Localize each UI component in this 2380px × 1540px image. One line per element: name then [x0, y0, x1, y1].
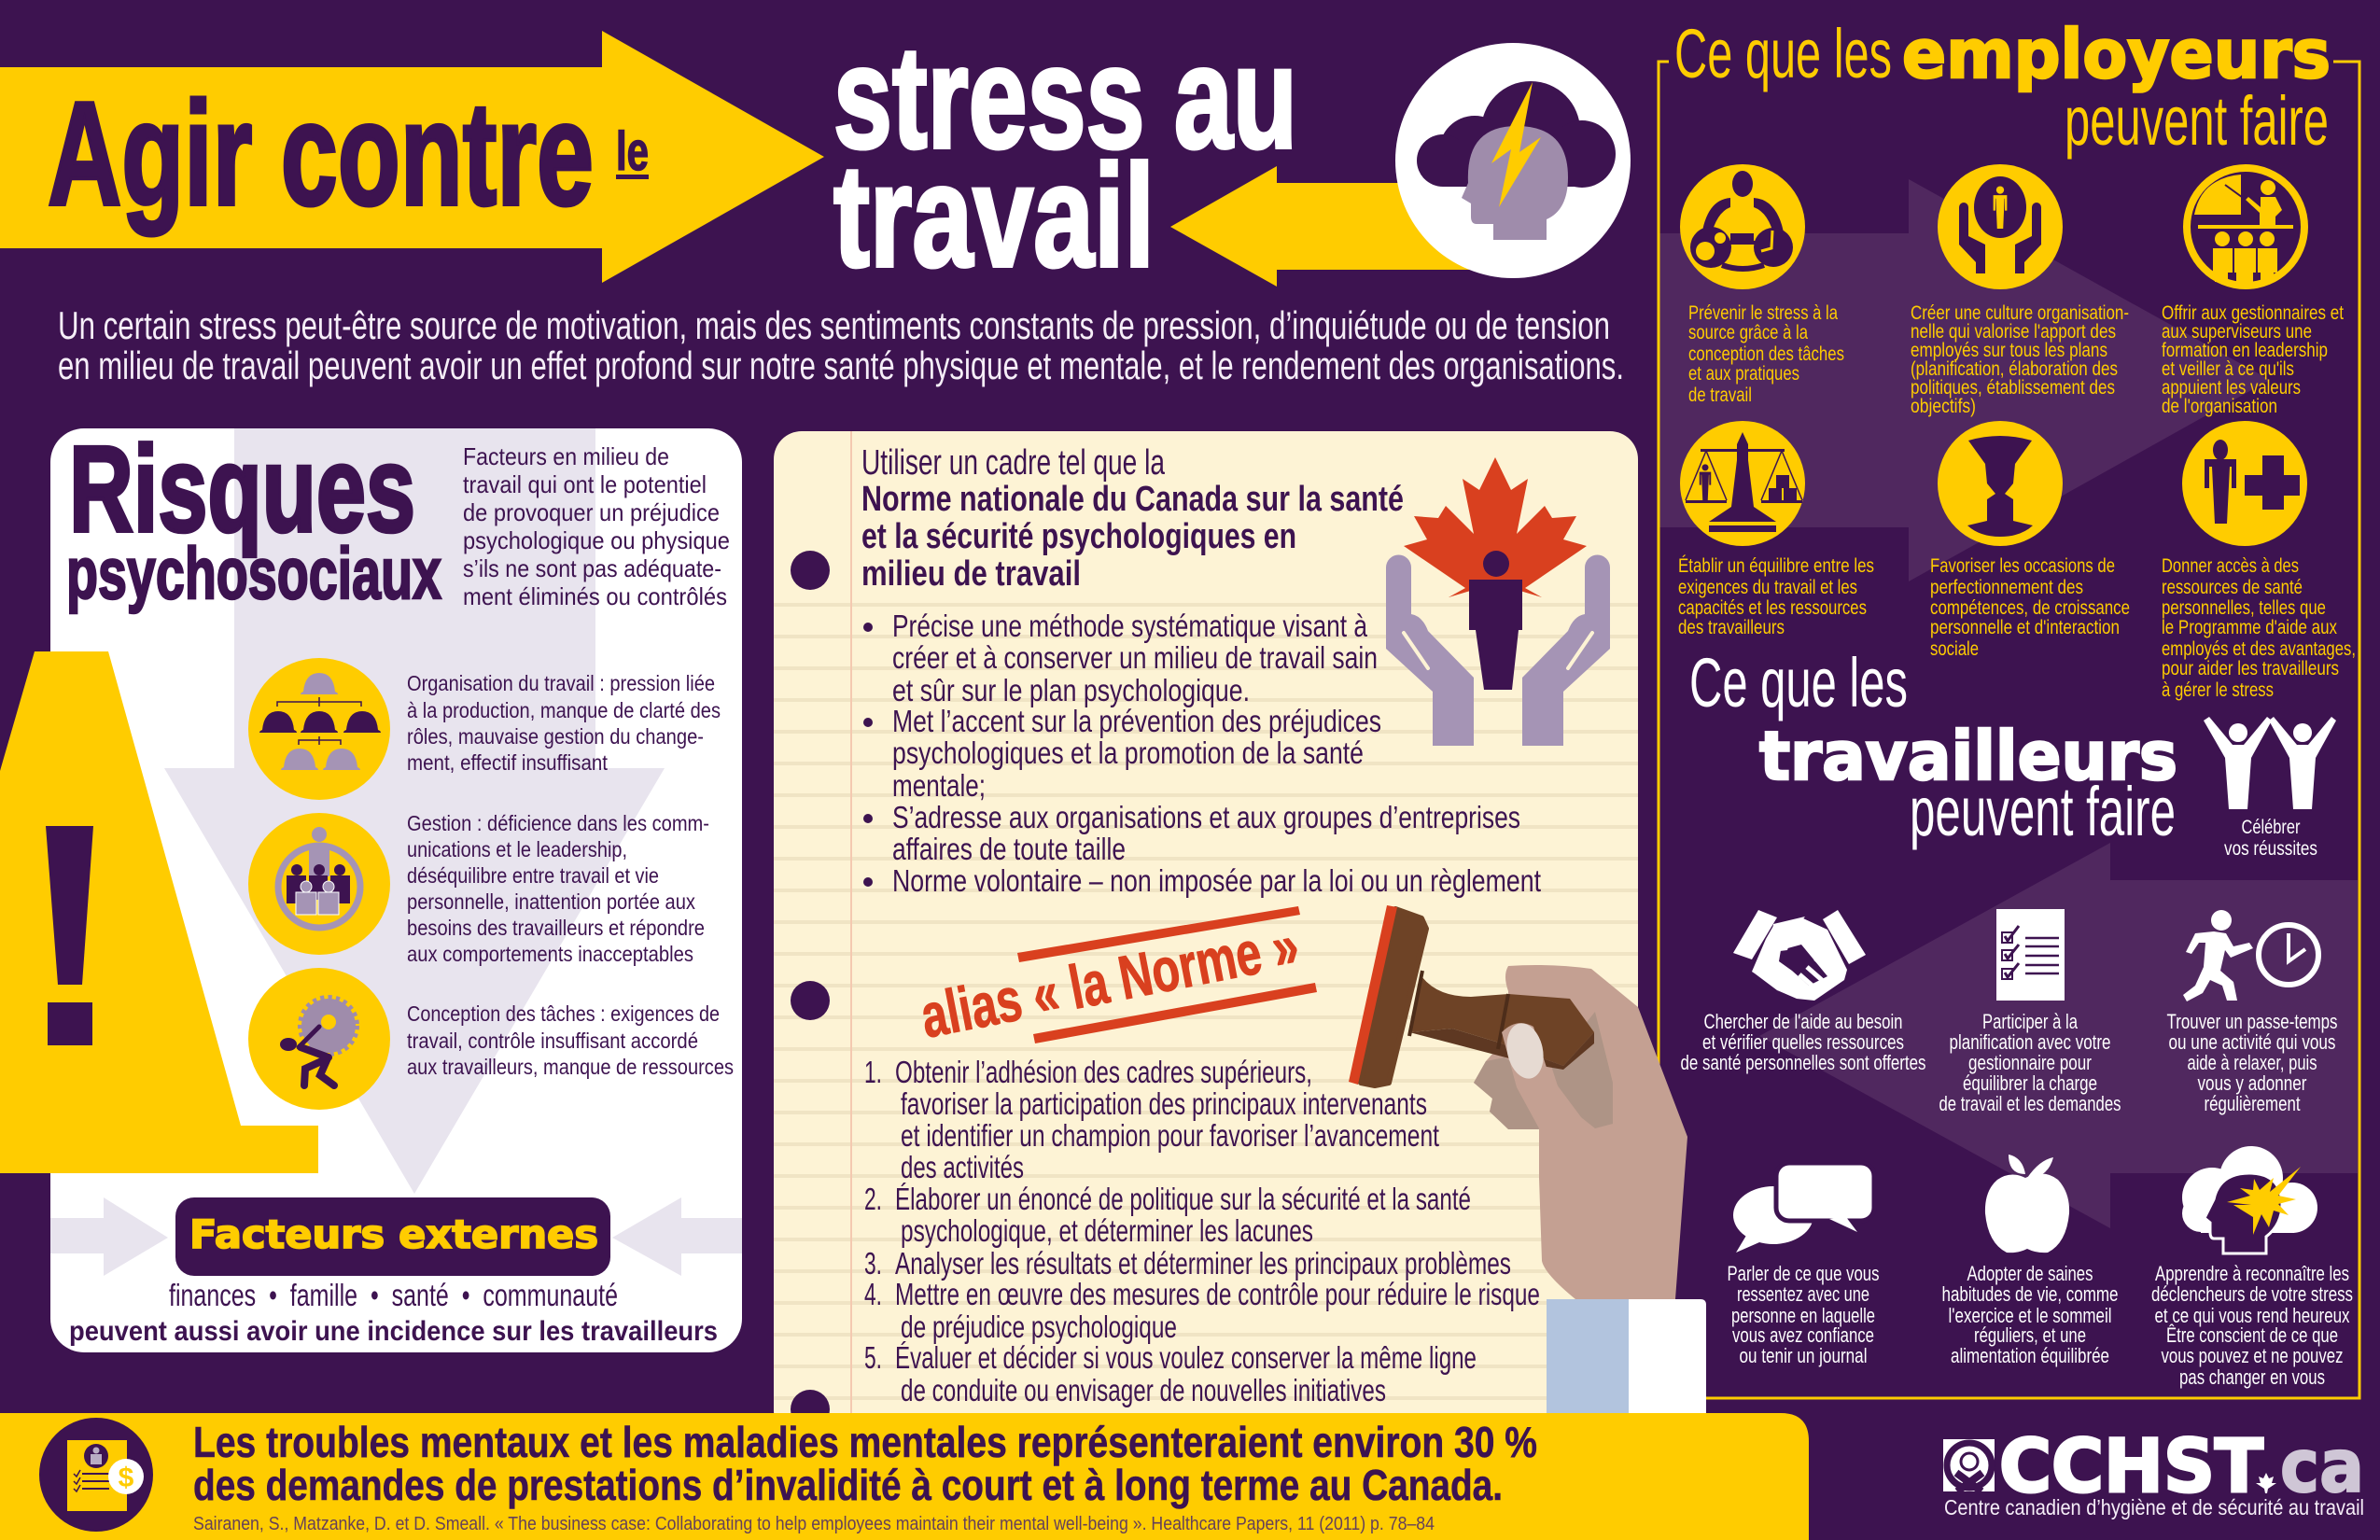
- panel border: [1659, 62, 2359, 1398]
- icon: document and dollar: $: [119, 1463, 134, 1493]
- text: celebrate: vos réussites: [2224, 838, 2317, 860]
- numbered list: favoriser la participation des principaux intervenants: [901, 1086, 1427, 1121]
- text: balance: exigences du travail et les: [1678, 577, 1857, 598]
- heading: employers: [1674, 15, 2331, 160]
- text: balance: [1678, 555, 1874, 638]
- numbered list: psychologique, et déterminer les lacunes: [901, 1213, 1313, 1248]
- text: celebrate: [2224, 817, 2317, 860]
- text: management: unications et le leadership,: [407, 837, 627, 861]
- text: organizational culture: [1911, 302, 2129, 417]
- background arrow: from left: [50, 1197, 168, 1276]
- text: leadership training: [2162, 302, 2344, 417]
- heading: Risques psychosociaux: Risques: [69, 420, 415, 557]
- text: definition: travail qui ont le potentiel: [463, 470, 707, 498]
- title: Agir contre le: le: [616, 121, 649, 182]
- icon: head under storm cloud: [1395, 43, 1631, 278]
- text: health resources: Donner accès à des: [2162, 555, 2299, 577]
- icon: speech bubbles: [1733, 1163, 1874, 1253]
- icon: handshake: [1733, 910, 1866, 1001]
- bullet list: et sûr sur le plan psychologique.: [892, 673, 1250, 707]
- text: prevent at source: Prévenir le stress à la: [1688, 302, 1838, 324]
- text: work organisation: [407, 671, 721, 775]
- numbered list: de préjudice psychologique: [901, 1309, 1177, 1344]
- text: participate: Participer à la: [1982, 1010, 2079, 1033]
- icon: runner and clock: [2183, 910, 2318, 1001]
- text: leadership training: appuient les valeurs: [2162, 377, 2301, 399]
- text: leadership training: de l'organisation: [2162, 396, 2277, 417]
- numbered list: 1.: [864, 1055, 882, 1089]
- text: healthy habits: alimentation équilibrée: [1951, 1344, 2109, 1367]
- numbered list: Évaluer et décider si vous voulez conserver la même ligne: [895, 1340, 1477, 1375]
- text: talk: Parler de ce que vous: [1727, 1262, 1880, 1285]
- bullet list: Met l’accent sur la prévention des préjudices: [892, 704, 1381, 738]
- heading: national standard: et la sécurité psychologiques en: [861, 517, 1296, 556]
- icon: leadership training: [2183, 164, 2308, 289]
- text: work organisation: rôles, mauvaise gestion du change-: [407, 724, 704, 749]
- text: prevent at source: conception des tâches: [1688, 343, 1844, 365]
- text: balance: Établir un équilibre entre les: [1678, 555, 1874, 577]
- text: external factor list: finances • famille • santé • communauté: [169, 1278, 618, 1312]
- text: health resources: [2162, 555, 2356, 701]
- logo: CCHST.ca: ca: [2280, 1425, 2364, 1509]
- background arrow: employers: [1659, 179, 2270, 581]
- icon: maple leaf, hands and person: [1386, 457, 1610, 746]
- text: health resources: le Programme d'aide aux: [2162, 617, 2337, 638]
- text: definition: de provoquer un préjudice: [463, 498, 720, 526]
- heading: national standard: [861, 443, 1404, 594]
- logo maple: [2256, 1473, 2276, 1493]
- text: prevent at source: source grâce à la: [1688, 322, 1808, 343]
- bullet list: psychologiques et la promotion de la santé: [892, 735, 1364, 770]
- text: participate: équilibrer la charge: [1963, 1071, 2097, 1095]
- text: definition: s’ils ne sont pas adéquate-: [463, 554, 721, 582]
- text: management: déséquilibre entre travail et vie: [407, 863, 659, 888]
- text: healthy habits: [1941, 1262, 2119, 1367]
- heading: national standard: milieu de travail: [861, 554, 1081, 594]
- text: development: [1930, 555, 2130, 660]
- numbered list: Mettre en œuvre des mesures de contrôle pour réduire le risque: [895, 1277, 1540, 1311]
- text: recognize triggers: [2151, 1262, 2353, 1389]
- shirt cuff: [1547, 1299, 1706, 1421]
- heading: Risques psychosociaux: [66, 420, 441, 614]
- numbered list: et identifier un champion pour favoriser l’avancement: [901, 1118, 1439, 1153]
- title: Agir contre le: Agir contre: [48, 72, 594, 236]
- heading: workers: [1689, 644, 2177, 850]
- icon: document and dollar: [39, 1418, 153, 1532]
- numbered list: de conduite ou envisager de nouvelles initiatives: [901, 1373, 1386, 1407]
- heading: national standard: Utiliser un cadre tel que la: [861, 443, 1166, 483]
- text: organizational culture: (planification, élaboration des: [1911, 358, 2118, 380]
- text: hobby: aide à relaxer, puis: [2188, 1051, 2317, 1074]
- text: work organisation: à la production, manque de clarté des: [407, 698, 721, 722]
- text: seek help: et vérifier quelles ressources: [1702, 1030, 1904, 1054]
- text: management: Gestion : déficience dans les comm-: [407, 811, 709, 835]
- text: work organisation: ment, effectif insuffisant: [407, 750, 609, 775]
- background arrow: workers: [1759, 843, 2358, 1228]
- text: development: personnelle et d'interaction: [1930, 617, 2120, 638]
- title: stress au travail: [833, 17, 1297, 298]
- text: job design: Conception des tâches : exigences de: [407, 1001, 720, 1026]
- numbered list: Analyser les résultats et déterminer les principaux problèmes: [895, 1246, 1511, 1281]
- text: participate: gestionnaire pour: [1968, 1051, 2092, 1074]
- bullet list: Norme volontaire – non imposée par la loi ou un règlement: [892, 863, 1541, 898]
- text: healthy habits: réguliers, et une: [1974, 1323, 2086, 1347]
- text: healthy habits: l'exercice et le sommeil: [1949, 1304, 2111, 1327]
- heading: employers: Ce que les: [1674, 15, 1892, 92]
- stamp text: alias la Norme: [916, 906, 1317, 1051]
- text: definition: psychologique ou physique: [463, 526, 730, 554]
- text: job design: travail, contrôle insuffisant accordé: [407, 1029, 698, 1053]
- text: external factor impact: peuvent aussi avoir une incidence sur les travailleurs: [69, 1316, 718, 1347]
- icon: celebrating workers: [2204, 717, 2336, 809]
- bullet list: affaires de toute taille: [892, 832, 1126, 866]
- bullet list: créer et à conserver un milieu de travail sain: [892, 640, 1378, 675]
- text: management: besoins des travailleurs et répondre: [407, 916, 705, 940]
- text: seek help: de santé personnelles sont offertes: [1680, 1051, 1926, 1074]
- numbered list: Élaborer un énoncé de politique sur la sécurité et la santé: [895, 1182, 1471, 1216]
- text: talk: vous avez confiance: [1732, 1323, 1874, 1347]
- text: hobby: régulièrement: [2205, 1092, 2300, 1115]
- text: development: Favoriser les occasions de: [1930, 555, 2115, 577]
- icon: faces and vase: [1938, 421, 2063, 546]
- text: recognize triggers: pas changer en vous: [2179, 1365, 2325, 1389]
- numbered list: 2.: [864, 1182, 882, 1216]
- background arrow: downward: [164, 428, 665, 1194]
- text: definition: Facteurs en milieu de: [463, 442, 669, 470]
- icon: person and medical cross: [2182, 421, 2307, 546]
- heading: Risques psychosociaux: psychosociaux: [66, 532, 441, 614]
- text: talk: personne en laquelle: [1731, 1304, 1875, 1327]
- text: health resources: à gérer le stress: [2162, 679, 2274, 701]
- icon: apple: [1985, 1155, 2069, 1253]
- text: organizational culture: Créer une culture organisation-: [1911, 302, 2129, 324]
- text: prevent at source: [1688, 302, 1844, 406]
- numbered list: Obtenir l’adhésion des cadres supérieurs,: [895, 1055, 1312, 1089]
- text: seek help: Chercher de l'aide au besoin: [1704, 1010, 1902, 1033]
- icon: organisation helmets: [248, 658, 390, 800]
- icon: organizational culture: [1938, 164, 2063, 289]
- panel: disability claims statistic bar: [0, 1413, 1809, 1540]
- intro text: Un certain stress peut-être source de motivation, mais des sentiments constants de pression, d’inquiétude ou de tension: [58, 303, 1610, 347]
- text: leadership training: aux superviseurs une: [2162, 321, 2312, 343]
- text: talk: ou tenir un journal: [1740, 1344, 1867, 1367]
- text: work organisation: Organisation du travail : pression liée: [407, 671, 715, 695]
- heading: workers: peuvent faire: [1910, 773, 2176, 850]
- text: organizational culture: employés sur tous les plans: [1911, 340, 2107, 361]
- bullet list: mentale;: [892, 768, 986, 803]
- text: job design: aux travailleurs, manque de ressources: [407, 1055, 734, 1079]
- text: healthy habits: habitudes de vie, comme: [1941, 1282, 2119, 1306]
- text: hobby: [2167, 1010, 2337, 1115]
- logo: CCHST.ca: [1943, 1425, 2364, 1519]
- badge: external factors: [175, 1197, 610, 1276]
- arrow: small yellow left arrow: [1170, 166, 1531, 287]
- badge: external factors: Facteurs externes: [189, 1211, 598, 1257]
- text: health resources: ressources de santé: [2162, 577, 2303, 598]
- icon: prevent at source: [1680, 164, 1805, 289]
- logo: CCHST.ca: CCHST: [1999, 1425, 2263, 1509]
- text: participate: de travail et les demandes: [1939, 1092, 2121, 1115]
- text: leadership training: Offrir aux gestionnaires et: [2162, 302, 2344, 324]
- stamp text: alias la Norme: alias « la Norme »: [916, 910, 1304, 1051]
- panel: what employers and workers can do: [1659, 15, 2359, 1398]
- numbered list: 5.: [864, 1340, 882, 1375]
- intro text: [58, 303, 1624, 387]
- numbered list: 3.: [864, 1246, 882, 1281]
- statistic text: Les troubles mentaux et les maladies mentales représenteraient environ 30 %: [193, 1418, 1537, 1466]
- icon: checklist: [1996, 909, 2065, 1001]
- panel: psychosocial risks: [0, 420, 742, 1352]
- heading: workers: travailleurs: [1759, 717, 2177, 795]
- illustration: hand holding stamp: [1349, 905, 1687, 1299]
- icon: person pushing gear: [248, 968, 390, 1110]
- text: participate: [1939, 1010, 2121, 1115]
- text: prevent at source: et aux pratiques: [1688, 363, 1799, 385]
- panel: notepad with standard: [774, 431, 1638, 1439]
- text: management: aux comportements inacceptables: [407, 942, 693, 966]
- text: organizational culture: nelle qui valorise l'apport des: [1911, 321, 2116, 343]
- intro text: en milieu de travail peuvent avoir un effet profond sur notre santé physique et mentale, et le rendement des organisations.: [58, 343, 1624, 387]
- text: development: compétences, de croissance: [1930, 597, 2130, 619]
- text: management: [407, 811, 709, 966]
- bullet list: S’adresse aux organisations et aux groupes d’entreprises: [892, 800, 1520, 834]
- numbered list: 4.: [864, 1277, 882, 1311]
- heading: workers: Ce que les: [1689, 644, 1908, 721]
- icon: balance scale: [1680, 421, 1805, 546]
- bullet list: Précise une méthode systématique visant à: [892, 609, 1368, 643]
- arrow: large yellow right arrow: [0, 31, 824, 283]
- text: talk: [1727, 1262, 1880, 1367]
- icon: management group: [248, 813, 390, 955]
- heading: employers: employeurs: [1902, 15, 2331, 93]
- heading: national standard: Norme nationale du Canada sur la santé: [861, 480, 1404, 519]
- text: prevent at source: de travail: [1688, 385, 1752, 406]
- text: participate: planification avec votre: [1949, 1030, 2111, 1054]
- text: management: personnelle, inattention portée aux: [407, 889, 695, 914]
- title: stress au travail: stress au: [833, 17, 1297, 179]
- text: hobby: ou une activité qui vous: [2169, 1030, 2335, 1054]
- text: balance: capacités et les ressources: [1678, 597, 1867, 619]
- text: health resources: personnelles, telles que: [2162, 597, 2326, 619]
- text: seek help: [1680, 1010, 1926, 1074]
- bullet list: [863, 609, 1541, 898]
- text: hobby: vous y adonner: [2197, 1071, 2307, 1095]
- text: health resources: pour aider les travailleurs: [2162, 658, 2339, 679]
- logo mark: [1943, 1439, 1995, 1491]
- text: balance: des travailleurs: [1678, 617, 1785, 638]
- binder holes: [791, 551, 830, 1429]
- citation: Sairanen, S., Matzanke, D. et D. Smeall. « The business case: Collaborating to help employees maintain their mental well-being ». Healthcare Papers, 11 (2011) p. 78–84: [193, 1514, 1435, 1534]
- icon: warning triangle: [0, 651, 318, 1173]
- text: talk: ressentez avec une: [1737, 1282, 1869, 1306]
- background arrow: from right: [612, 1197, 742, 1276]
- text: development: sociale: [1930, 638, 1979, 660]
- statistic text: des demandes de prestations d’invalidité à court et à long terme au Canada.: [193, 1461, 1503, 1509]
- numbered list: [864, 1055, 1540, 1407]
- text: healthy habits: Adopter de saines: [1967, 1262, 2093, 1285]
- text: definition: ment éliminés ou contrôlés: [463, 582, 727, 610]
- icon: head with cloud and burst: [2182, 1146, 2317, 1253]
- text: job design: [407, 1001, 734, 1079]
- text: leadership training: formation en leadership: [2162, 340, 2328, 361]
- title: stress au travail: travail: [833, 135, 1155, 298]
- text: organizational culture: objectifs): [1911, 396, 1976, 417]
- statistic text: [193, 1418, 1537, 1509]
- text: celebrate: Célébrer: [2242, 817, 2300, 838]
- text: leadership training: et veiller à ce qu'ils: [2162, 358, 2294, 380]
- numbered list: des activités: [901, 1150, 1024, 1184]
- text: definition: [463, 442, 730, 610]
- text: development: perfectionnement des: [1930, 577, 2083, 598]
- text: organizational culture: politiques, établissement des: [1911, 377, 2115, 399]
